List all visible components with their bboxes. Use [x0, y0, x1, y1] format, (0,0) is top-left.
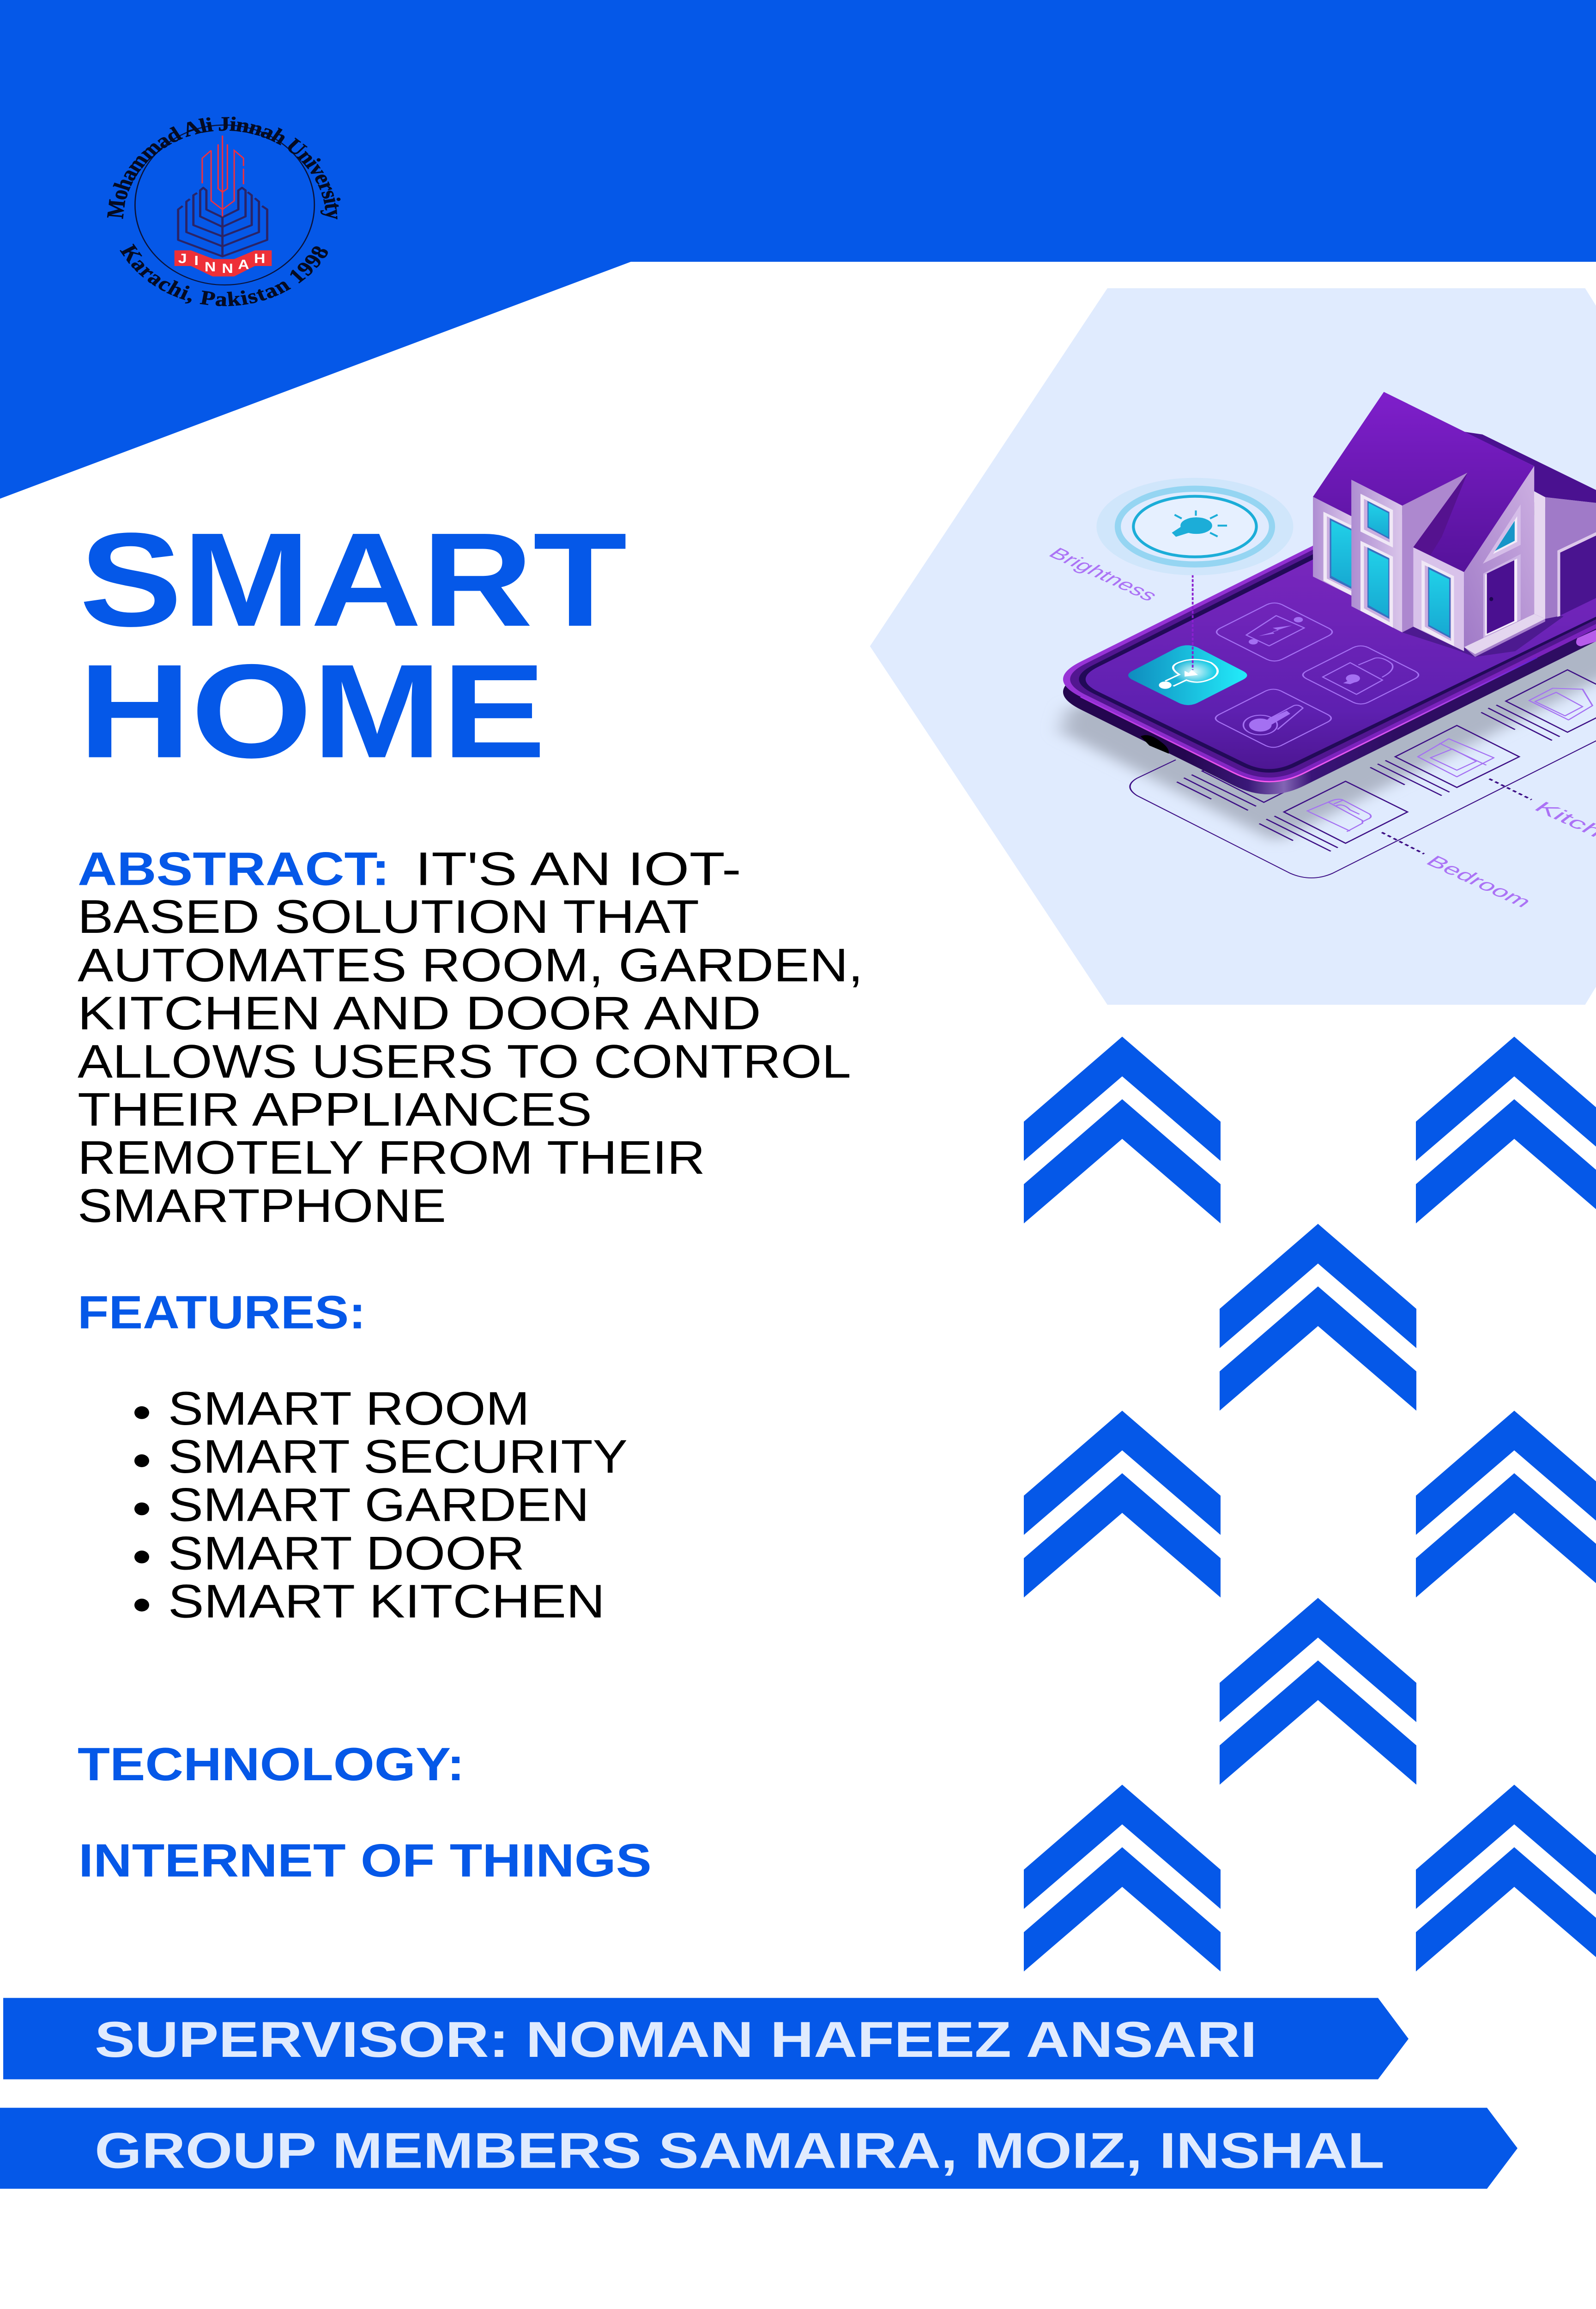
icon: small bulb — [1172, 510, 1227, 537]
banner: supervisor: SUPERVISOR: NOMAN HAFEEZ ANSARI — [95, 2012, 1257, 2068]
porch step — [1464, 614, 1545, 654]
icon: oven — [1418, 739, 1494, 777]
banner: group members: GROUP MEMBERS SAMAIRA, MOIZ, INSHAL — [95, 2122, 1384, 2179]
left wing wall and window — [1313, 497, 1351, 596]
gable wall, door and triangle window — [1464, 466, 1534, 647]
dashed line: brightness connector — [1191, 566, 1194, 670]
title: SMART — [79, 506, 627, 654]
logo ring — [135, 125, 314, 285]
abstract text block: SMARTPHONE — [78, 1179, 446, 1232]
features list: SMART KITCHEN — [168, 1575, 605, 1628]
features list: SMART SECURITY — [168, 1430, 628, 1483]
app tile: light bulb active — [1128, 645, 1247, 705]
arrow: row 5 left — [1024, 1785, 1221, 1971]
app tile: battery — [1217, 603, 1332, 661]
abstract text block — [78, 843, 863, 1232]
phone screen — [1086, 483, 1596, 769]
features list — [134, 1382, 628, 1628]
abstract text block: AUTOMATES ROOM, GARDEN, — [78, 939, 863, 991]
floor plan and phone — [1061, 469, 1596, 878]
logo emblem: navy book chevrons — [178, 188, 267, 256]
abstract text block: BASED SOLUTION THAT — [78, 890, 699, 943]
abstract text block: REMOTELY FROM THEIR — [78, 1131, 705, 1184]
phone shadow — [1061, 601, 1596, 841]
label: Brightness: Brightness — [1044, 544, 1163, 604]
features list: SMART GARDEN — [168, 1479, 589, 1531]
icon: house room — [1529, 688, 1592, 720]
arrow: row 3 left — [1024, 1411, 1221, 1597]
phone dark band — [1079, 477, 1596, 773]
features heading: FEATURES: — [78, 1287, 366, 1339]
middle wall and window — [1413, 547, 1464, 651]
abstract text block: ABSTRACT: — [78, 843, 390, 895]
features list: SMART ROOM — [168, 1382, 530, 1435]
dormer front wall and windows — [1351, 480, 1402, 632]
university logo — [102, 113, 347, 311]
title: HOME — [79, 637, 546, 786]
arrow: row 3 right — [1416, 1411, 1596, 1597]
features list: SMART DOOR — [168, 1527, 525, 1580]
icon: bed — [1307, 799, 1371, 831]
smart light control rings — [1096, 478, 1293, 575]
house shadow — [1402, 586, 1564, 657]
phone body — [1063, 482, 1596, 794]
phone rim glow — [1081, 658, 1537, 782]
phone side button — [1576, 628, 1596, 647]
technology value: INTERNET OF THINGS — [79, 1835, 652, 1887]
label: Bedroom: Bedroom — [1421, 852, 1537, 911]
main roof — [1313, 392, 1534, 572]
abstract text block: IT'S AN IOT- — [415, 843, 741, 895]
floor plan rooms — [1177, 670, 1596, 851]
logo text: bottom arc: Karachi, Pakistan 1998 — [115, 241, 335, 311]
phone inner bevel — [1070, 472, 1596, 778]
floor plan outline — [1130, 728, 1596, 878]
logo text: top arc: Mohammad Ali Jinnah University — [102, 113, 347, 220]
abstract text block: ALLOWS USERS TO CONTROL — [78, 1035, 851, 1088]
abstract text block: THEIR APPLIANCES — [78, 1083, 592, 1136]
title — [79, 506, 627, 786]
technology heading: TECHNOLOGY: — [78, 1739, 465, 1790]
banner: group members — [0, 2108, 1517, 2189]
chevron arrows — [1024, 1037, 1596, 1971]
header band: blue angled background — [0, 0, 1596, 499]
arrow: row 4 centre — [1220, 1598, 1416, 1785]
phone rim — [1063, 469, 1596, 782]
arrow: row 5 right — [1416, 1785, 1596, 1971]
arrow: row 1 right — [1416, 1037, 1596, 1223]
house — [1313, 392, 1596, 657]
logo emblem: red tower lines — [202, 136, 243, 217]
hexagon background — [870, 288, 1596, 1005]
app tile: thermometer — [1215, 689, 1331, 747]
app tile: lock — [1303, 646, 1419, 704]
arrow: row 1 left — [1024, 1037, 1221, 1223]
garage door — [1557, 532, 1596, 617]
dashed line: bedroom connector — [1382, 833, 1424, 854]
illustration: smart home phone and house — [870, 288, 1596, 1005]
abstract text block: KITCHEN AND DOOR AND — [78, 987, 761, 1040]
pillar — [1534, 492, 1545, 619]
dashed line: kitchen connector — [1489, 779, 1531, 800]
garage wall — [1545, 497, 1596, 619]
banner: supervisor — [3, 1998, 1409, 2079]
arrow: row 2 centre — [1220, 1224, 1416, 1411]
back roof — [1464, 432, 1596, 503]
phone port — [1141, 735, 1169, 754]
logo banner JINNAH: JINNAH — [178, 251, 266, 276]
dormer side wall — [1402, 473, 1468, 632]
